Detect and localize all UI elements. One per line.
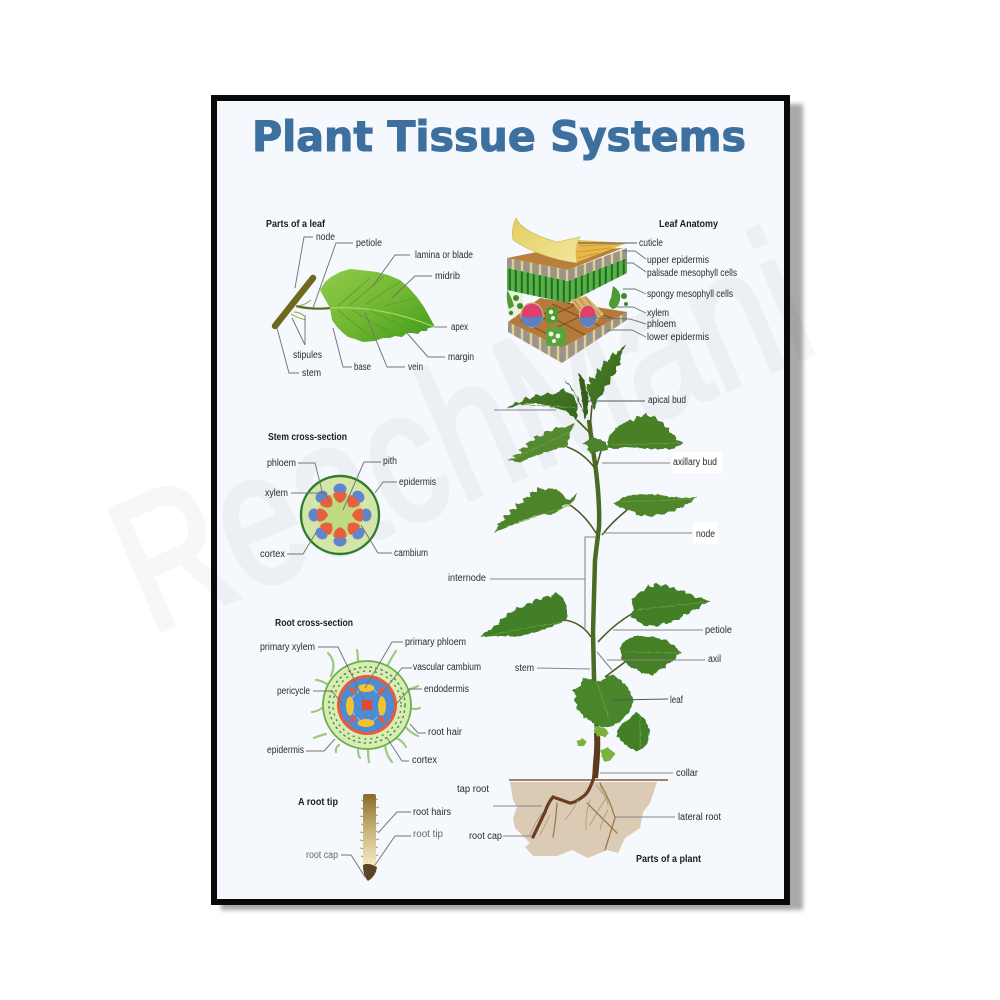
stem cross-section labels: epidermis [399,477,436,488]
leaf labels: node [316,232,335,243]
stem cross-section labels: cortex [260,549,285,560]
plant labels: internode [448,573,486,584]
leaf labels: stipules [293,350,322,361]
root cross-section labels: primary xylem [260,642,315,653]
stem cross-section labels [260,456,436,560]
plant labels: axillary bud [673,457,717,468]
root cross-section diagram [312,650,420,762]
root tip labels: root hairs [413,807,451,818]
leaf anatomy block diagram [507,218,628,363]
root tip labels [306,807,451,877]
plant labels: lateral root [678,812,721,823]
leaf labels: base [354,362,371,373]
stem cross-section labels: phloem [267,458,296,469]
plant labels: node [696,529,715,540]
leaf labels: apex [451,322,468,333]
leaf labels: stem [302,368,321,379]
plant labels: stem [515,663,534,674]
panel: parts of a leaf [266,219,474,379]
plant labels: apical bud [648,395,686,406]
background shadow of poster [221,104,803,910]
leaf labels [277,232,474,379]
plant labels [448,395,732,842]
plant labels: petiole [705,625,732,636]
plant foliage [480,344,710,762]
leaf labels: vein [408,362,423,373]
root cross-section labels: endodermis [424,684,469,695]
panel: a root tip [298,794,451,881]
heading: a root tip: A root tip [298,797,338,808]
leaf labels: midrib [435,271,460,282]
panel: parts of a plant [448,344,732,865]
heading: parts of a leaf: Parts of a leaf [266,219,326,230]
root cross-section labels: pericycle [277,686,310,697]
panel: leaf anatomy [507,218,737,363]
leaf stem and petiole [275,278,331,326]
root cross-section labels: epidermis [267,745,304,756]
leaf anatomy labels: upper epidermis [647,255,709,266]
plant labels: leaf [670,695,683,706]
root cross-section labels: primary phloem [405,637,466,648]
stem cross-section labels: pith [383,456,397,467]
heading: stem cross-section: Stem cross-section [268,432,347,443]
root cross-section labels: vascular cambium [413,662,481,673]
lower stem brown [595,733,597,778]
root tip labels: root cap [306,850,338,861]
panel: root cross-section [260,618,481,766]
root tip diagram [360,794,379,881]
root cross-section labels: cortex [412,755,437,766]
root tip labels: root tip [413,829,443,840]
soil surface line [509,779,668,781]
leaf anatomy labels: xylem [647,308,669,319]
poster frame [214,98,787,902]
plant labels: root cap [469,831,502,842]
leaf labels: lamina or blade [415,250,473,261]
leaf anatomy labels [578,238,737,343]
leaf anatomy labels: phloem [647,319,676,330]
plant labels: axil [708,654,721,665]
leaf blade [320,269,435,342]
plant labels: collar [676,768,699,779]
title: Plant Tissue Systems [252,112,746,161]
leaf anatomy labels: palisade mesophyll cells [647,268,737,279]
leaf anatomy labels: cuticle [639,238,663,249]
stem cross-section labels: xylem [265,488,288,499]
heading: root cross-section: Root cross-section [275,618,353,629]
panel: stem cross-section [260,432,436,560]
leaf anatomy labels: lower epidermis [647,332,709,343]
roots [530,740,617,850]
stem cross-section labels: cambium [394,548,428,559]
plant stem [589,420,599,733]
plant labels: tap root [457,784,489,795]
root cross-section labels [260,637,481,766]
leaf anatomy labels: spongy mesophyll cells [647,289,733,300]
leaf labels: margin [448,352,474,363]
root cross-section labels: root hair [428,727,463,738]
heading: leaf anatomy: Leaf Anatomy [659,219,718,230]
petioles [565,405,633,677]
leaf labels: petiole [356,238,382,249]
stem cross-section diagram [301,476,379,554]
soil block [510,782,657,858]
heading: parts of a plant: Parts of a plant [636,854,702,865]
